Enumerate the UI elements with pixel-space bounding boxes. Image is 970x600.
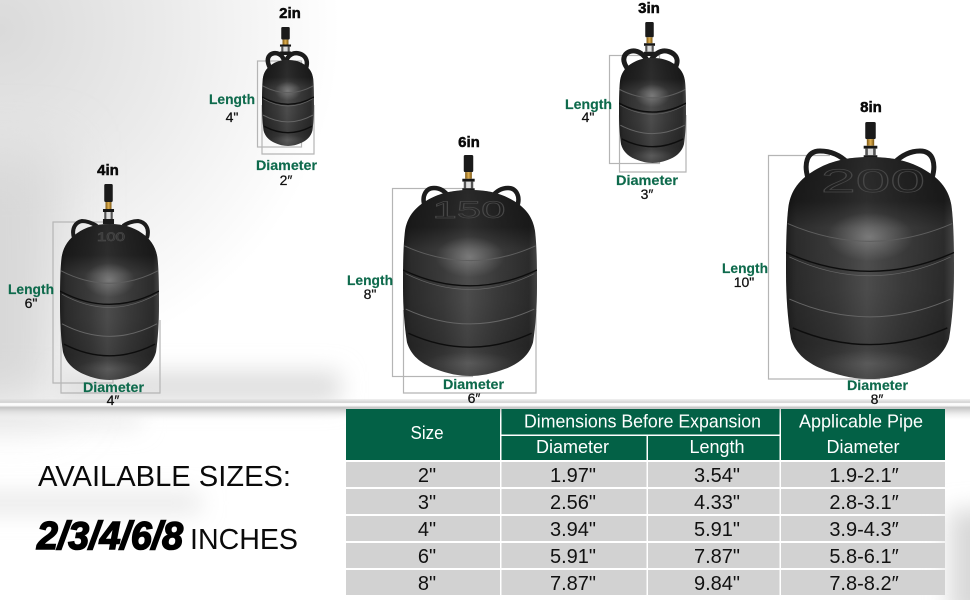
diameter value: 8″	[871, 391, 883, 407]
row 8 inch: 8"	[418, 573, 436, 595]
row 3 inch	[346, 489, 945, 514]
diameter label: Diameter	[616, 172, 679, 188]
table header: Dimensions Before Expansion	[524, 412, 761, 432]
row 3 inch: 4.33"	[694, 492, 740, 514]
length label: Length	[565, 96, 612, 112]
row 4 inch: 5.91"	[694, 519, 740, 541]
row 6 inch: 6"	[418, 546, 436, 568]
length bracket	[258, 61, 302, 147]
length label: Length	[722, 260, 768, 276]
size label 6in: 6in	[458, 134, 480, 151]
row 6 inch: 5.91"	[550, 546, 596, 568]
diameter bracket	[61, 320, 160, 393]
embossed 200: 200	[821, 163, 925, 199]
row 6 inch: 7.87"	[694, 546, 740, 568]
handles	[73, 221, 148, 238]
size list	[36, 515, 298, 558]
handles	[624, 51, 677, 68]
row 2 inch: 3.54"	[694, 465, 740, 487]
length bracket	[610, 56, 660, 164]
barrel body	[403, 190, 537, 376]
valve	[280, 27, 291, 55]
row 4 inch: 3.9-4.3″	[829, 519, 899, 541]
handles	[806, 151, 934, 178]
table header: Diameter	[826, 437, 900, 457]
table header	[346, 409, 945, 460]
barrel body	[619, 58, 686, 163]
size table	[346, 409, 945, 595]
sample: 4 inch plug	[8, 162, 160, 408]
diameter bracket	[262, 105, 314, 154]
row 4 inch: 4"	[418, 519, 436, 541]
row 8 inch: 7.87"	[550, 573, 596, 595]
table header: Applicable Pipe	[799, 412, 923, 432]
barrel body	[262, 60, 314, 146]
table header: Diameter	[536, 437, 609, 457]
length bracket	[392, 188, 472, 376]
length value: 6"	[25, 295, 37, 311]
heading: available sizes: AVAILABLE SIZES:	[38, 461, 291, 493]
barrel body	[786, 157, 954, 379]
length label: Length	[347, 272, 393, 288]
size label 8in: 8in	[860, 99, 882, 116]
diameter label: Diameter	[443, 376, 505, 392]
inches: INCHES	[190, 524, 298, 556]
size label 2in: 2in	[279, 5, 301, 22]
row 4 inch: 3.94"	[550, 519, 596, 541]
length bracket	[768, 156, 880, 379]
row 3 inch: 2.8-3.1″	[829, 492, 899, 514]
row 2 inch: 1.9-2.1″	[829, 465, 899, 487]
row 6 inch: 5.8-6.1″	[829, 546, 899, 568]
valve	[103, 184, 114, 224]
valve	[462, 155, 475, 193]
length label: Length	[209, 91, 255, 107]
diameter value: 2″	[280, 172, 292, 188]
valve	[644, 22, 655, 56]
diameter value: 4″	[107, 392, 119, 408]
valve	[864, 122, 877, 160]
length value: 4"	[226, 109, 238, 125]
length bracket	[53, 222, 113, 383]
length value: 8"	[364, 286, 376, 302]
sample: 6 inch plug	[347, 134, 537, 406]
size label 3in: 3in	[638, 0, 660, 17]
barrel body	[60, 224, 159, 380]
embossed 150: 150	[432, 197, 506, 224]
length value: 10"	[734, 274, 754, 290]
sample: 8 inch plug	[722, 99, 954, 407]
embossed 100: 100	[97, 230, 125, 244]
diameter label: Diameter	[847, 377, 909, 393]
handles	[424, 188, 518, 207]
row 2 inch: 1.97"	[550, 465, 596, 487]
row 6 inch	[346, 543, 945, 568]
bold italic numbers: 2/3/4/6/8	[36, 515, 183, 558]
sample: 3 inch plug	[565, 0, 686, 202]
row 8 inch	[346, 570, 945, 595]
row 3 inch: 3"	[418, 492, 436, 514]
table header: Size	[410, 423, 444, 443]
length value: 4"	[582, 109, 594, 125]
diameter label: Diameter	[256, 157, 318, 173]
row 2 inch: 2"	[418, 465, 436, 487]
row 8 inch: 9.84"	[694, 573, 740, 595]
sample: 2 inch plug	[209, 5, 318, 188]
diameter label: Diameter	[83, 379, 145, 395]
diameter value: 6″	[468, 390, 480, 406]
row 2 inch	[346, 462, 945, 487]
row 3 inch: 2.56"	[550, 492, 596, 514]
handles	[268, 53, 307, 68]
shelf line	[0, 399, 970, 421]
diameter bracket	[620, 115, 686, 172]
diameter value: 3″	[641, 186, 653, 202]
table header: Length	[690, 437, 744, 457]
diameter bracket	[404, 310, 536, 393]
row 4 inch	[346, 516, 945, 541]
size label 4in: 4in	[97, 162, 119, 179]
row 8 inch: 7.8-8.2″	[829, 573, 899, 595]
length label: Length	[8, 281, 54, 297]
